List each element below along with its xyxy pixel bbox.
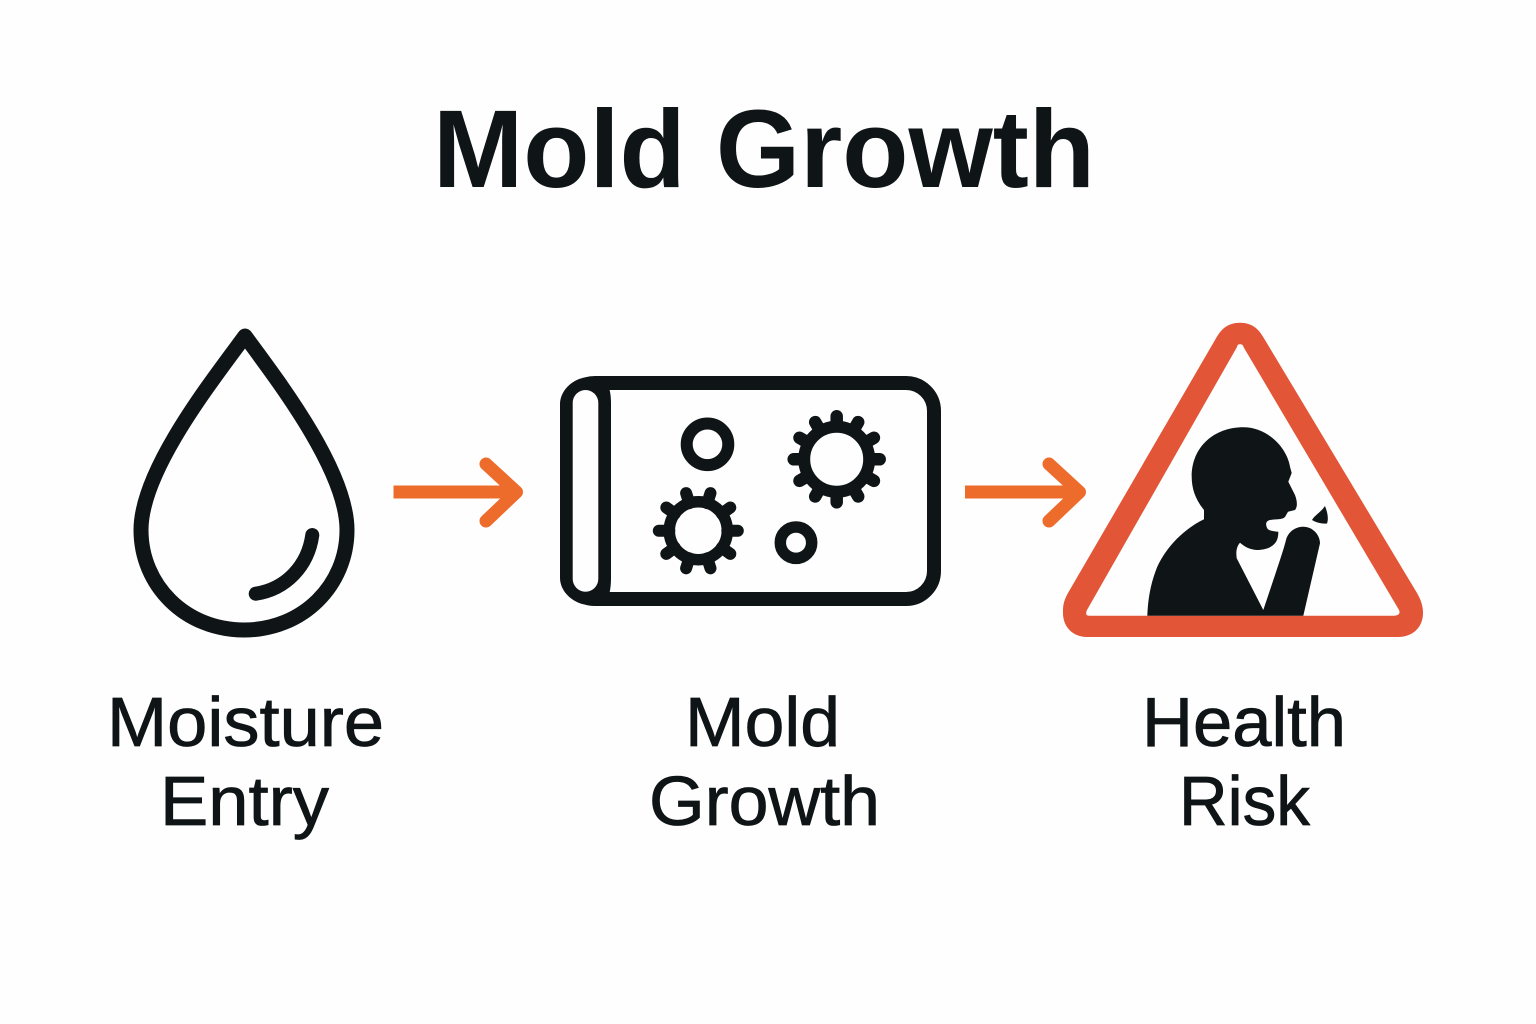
person silhouette: [1147, 427, 1320, 616]
label: mold growth: Growth: [649, 762, 880, 840]
label: health risk: [1142, 683, 1346, 840]
droplet: [1312, 506, 1328, 524]
icon: moldy surface: [560, 377, 934, 605]
small spore bottom: [780, 527, 812, 558]
panel frame: [567, 383, 934, 599]
label: mold growth: [649, 683, 880, 840]
icon: water drop: [141, 336, 347, 630]
label: health risk: Risk: [1179, 762, 1311, 840]
arrow: moisture to mold: [394, 464, 518, 521]
label: moisture entry: [107, 683, 384, 840]
rolled edge opening: [573, 390, 598, 592]
label: health risk: Health: [1142, 683, 1346, 761]
small spore top: [687, 424, 728, 465]
label: mold growth: Mold: [685, 683, 840, 761]
arrow: mold to health: [965, 464, 1080, 521]
label: moisture entry: Entry: [160, 762, 329, 840]
rolled edge: [560, 377, 611, 605]
large spore bottom left: [659, 493, 738, 568]
warning triangle: [1063, 323, 1423, 637]
icon: warning triangle with coughing person: [1063, 323, 1423, 637]
large spore top right: [794, 416, 880, 502]
title: Mold Growth: [433, 88, 1095, 211]
label: moisture entry: Moisture: [107, 683, 384, 761]
